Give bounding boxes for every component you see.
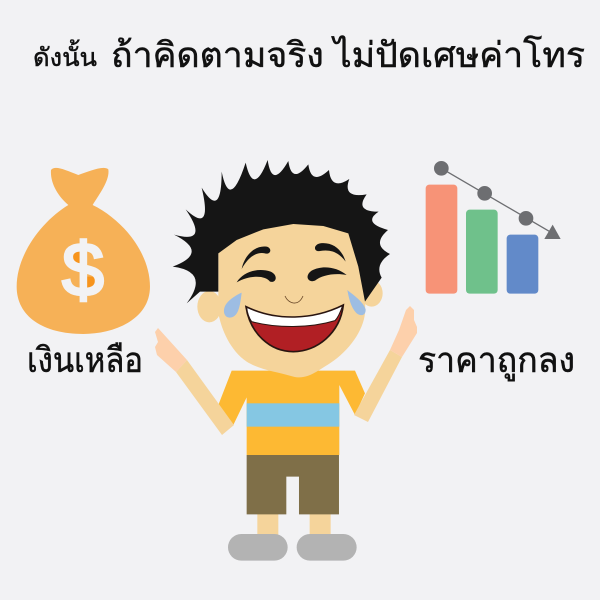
mouth (246, 305, 343, 352)
face (218, 213, 365, 377)
character: laughing boy (155, 160, 417, 561)
shorts (247, 455, 339, 514)
bar chart: falling prices (426, 161, 561, 294)
shoes (228, 534, 357, 561)
title: ดังนั้น (33, 39, 97, 72)
right arm (354, 306, 417, 422)
title: ถ้าคิดตามจริง ไม่ปัดเศษค่าโทร (111, 35, 585, 75)
icon: money bag: $ (62, 228, 104, 312)
hair (173, 160, 390, 303)
icon: money bag (17, 168, 150, 334)
label: price falls: ราคาถูกลง (418, 341, 575, 381)
left arm (155, 328, 234, 435)
head (173, 160, 390, 377)
tears (224, 290, 366, 318)
legs (257, 512, 331, 537)
nose (285, 296, 303, 303)
shirt (218, 371, 365, 455)
label: money left: เงินเหลือ (27, 341, 143, 380)
eyes (237, 267, 347, 282)
ears (197, 280, 383, 322)
eyebrows (242, 243, 346, 269)
